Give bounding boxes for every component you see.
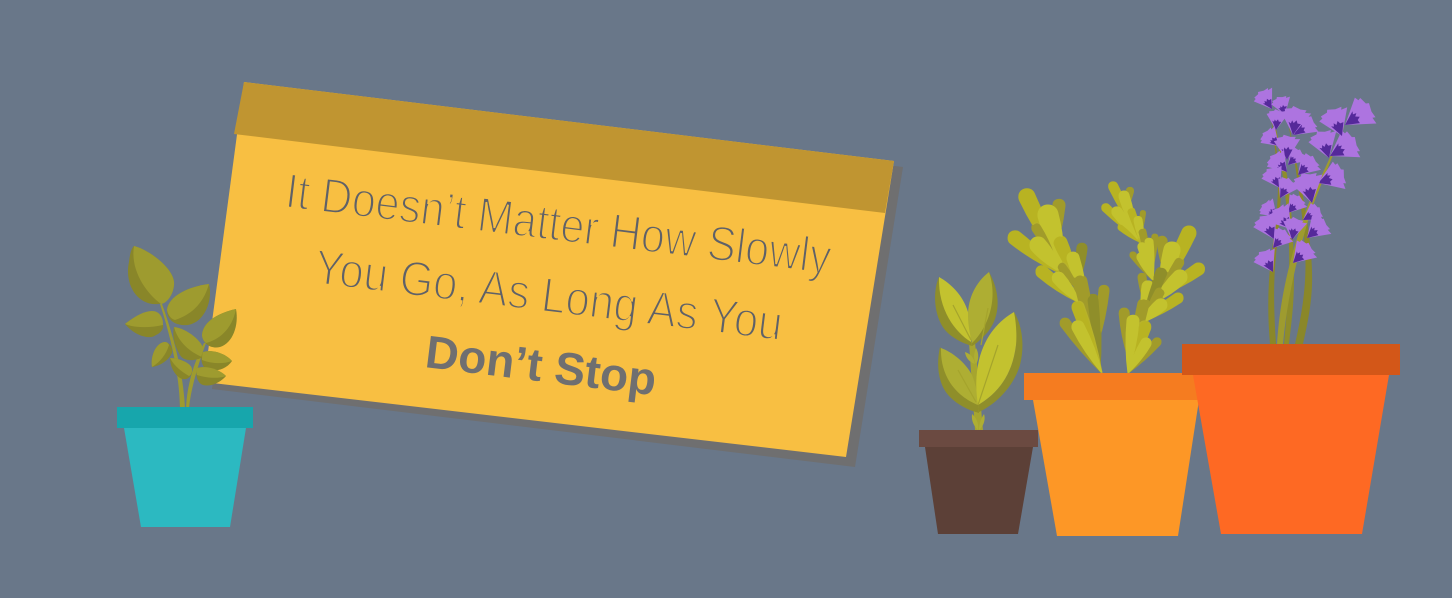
pot: orange — [1024, 373, 1200, 536]
teal pot rim — [117, 407, 253, 428]
red-orange pot body — [1193, 375, 1389, 534]
lower left leaf — [938, 347, 979, 413]
stems — [160, 304, 206, 408]
quote line 2: You Go, As Long As You — [312, 240, 786, 351]
leaf 2 — [167, 284, 210, 325]
red-orange pot rim — [1182, 344, 1400, 375]
quote line 3: Don’t Stop — [423, 325, 659, 405]
plant: basil — [935, 272, 1022, 430]
teal pot body — [124, 428, 246, 527]
quote line 1: It Doesn’t Matter How Slowly — [283, 164, 835, 285]
stem — [969, 342, 983, 430]
leaf 6 — [170, 358, 192, 379]
base leaves — [972, 414, 985, 430]
sign — [204, 82, 903, 467]
plant: lavender — [1250, 84, 1381, 344]
pot: red-orange — [1182, 344, 1400, 534]
small centre leaves — [965, 348, 978, 364]
pot: brown — [919, 430, 1038, 534]
leaf veins — [953, 305, 998, 405]
plant: rosemary left — [1005, 186, 1110, 376]
orange pot body — [1033, 400, 1199, 536]
orange pot rim — [1024, 373, 1200, 400]
sign shadow — [212, 88, 903, 467]
leaf 8 — [201, 351, 232, 371]
leaf 7 — [202, 309, 237, 348]
lavender stems — [1268, 110, 1281, 344]
leaf 3 — [125, 313, 163, 337]
large right leaf — [978, 312, 1022, 412]
sign top band — [234, 82, 894, 213]
sign card — [204, 82, 894, 457]
lavender flowers — [1250, 84, 1381, 278]
leaf 5 — [173, 327, 203, 360]
upper right leaf — [970, 272, 998, 346]
leaf 4 — [152, 342, 172, 367]
plant: left leafy plant — [125, 246, 237, 408]
leaf 9 — [196, 367, 226, 386]
leaf 1 — [128, 246, 174, 304]
brown pot body — [925, 447, 1033, 534]
plant: rosemary right — [1100, 180, 1207, 376]
brown pot rim — [919, 430, 1038, 447]
pot: teal — [117, 407, 253, 527]
upper left leaf — [935, 277, 972, 346]
